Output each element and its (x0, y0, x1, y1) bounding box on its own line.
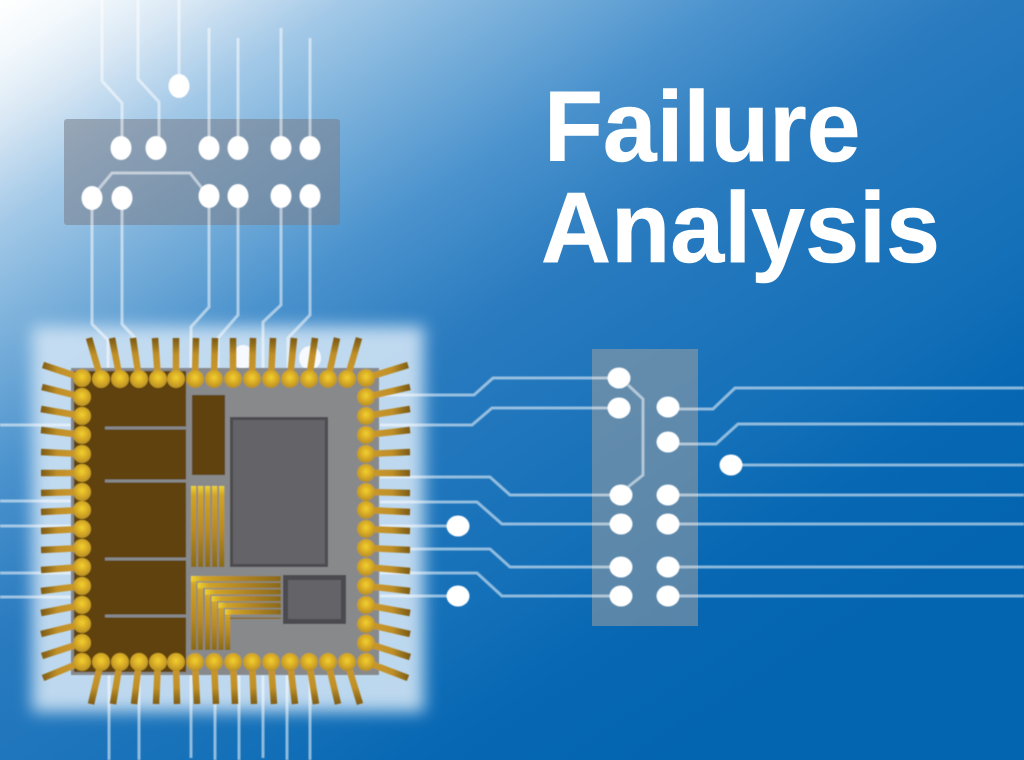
right connector panel (592, 349, 698, 626)
title: Failure (544, 70, 860, 182)
title: Analysis (541, 172, 940, 283)
microchip (41, 338, 410, 704)
small brown die (192, 395, 225, 475)
die separators (105, 426, 186, 618)
large grey block (232, 418, 326, 566)
right pins (366, 365, 410, 678)
chip glow (32, 326, 424, 712)
top pins (89, 338, 359, 379)
gold fingers (191, 486, 224, 567)
large brown die (74, 371, 186, 672)
bottom pins (91, 662, 360, 704)
gold bond pads (73, 369, 375, 671)
small grey block (286, 578, 344, 622)
upper connector panel (64, 119, 340, 225)
left pins (41, 365, 82, 678)
title (541, 70, 940, 283)
white connector pads (82, 74, 742, 606)
gold L-shaped traces (191, 576, 281, 650)
chip substrate (71, 368, 379, 675)
